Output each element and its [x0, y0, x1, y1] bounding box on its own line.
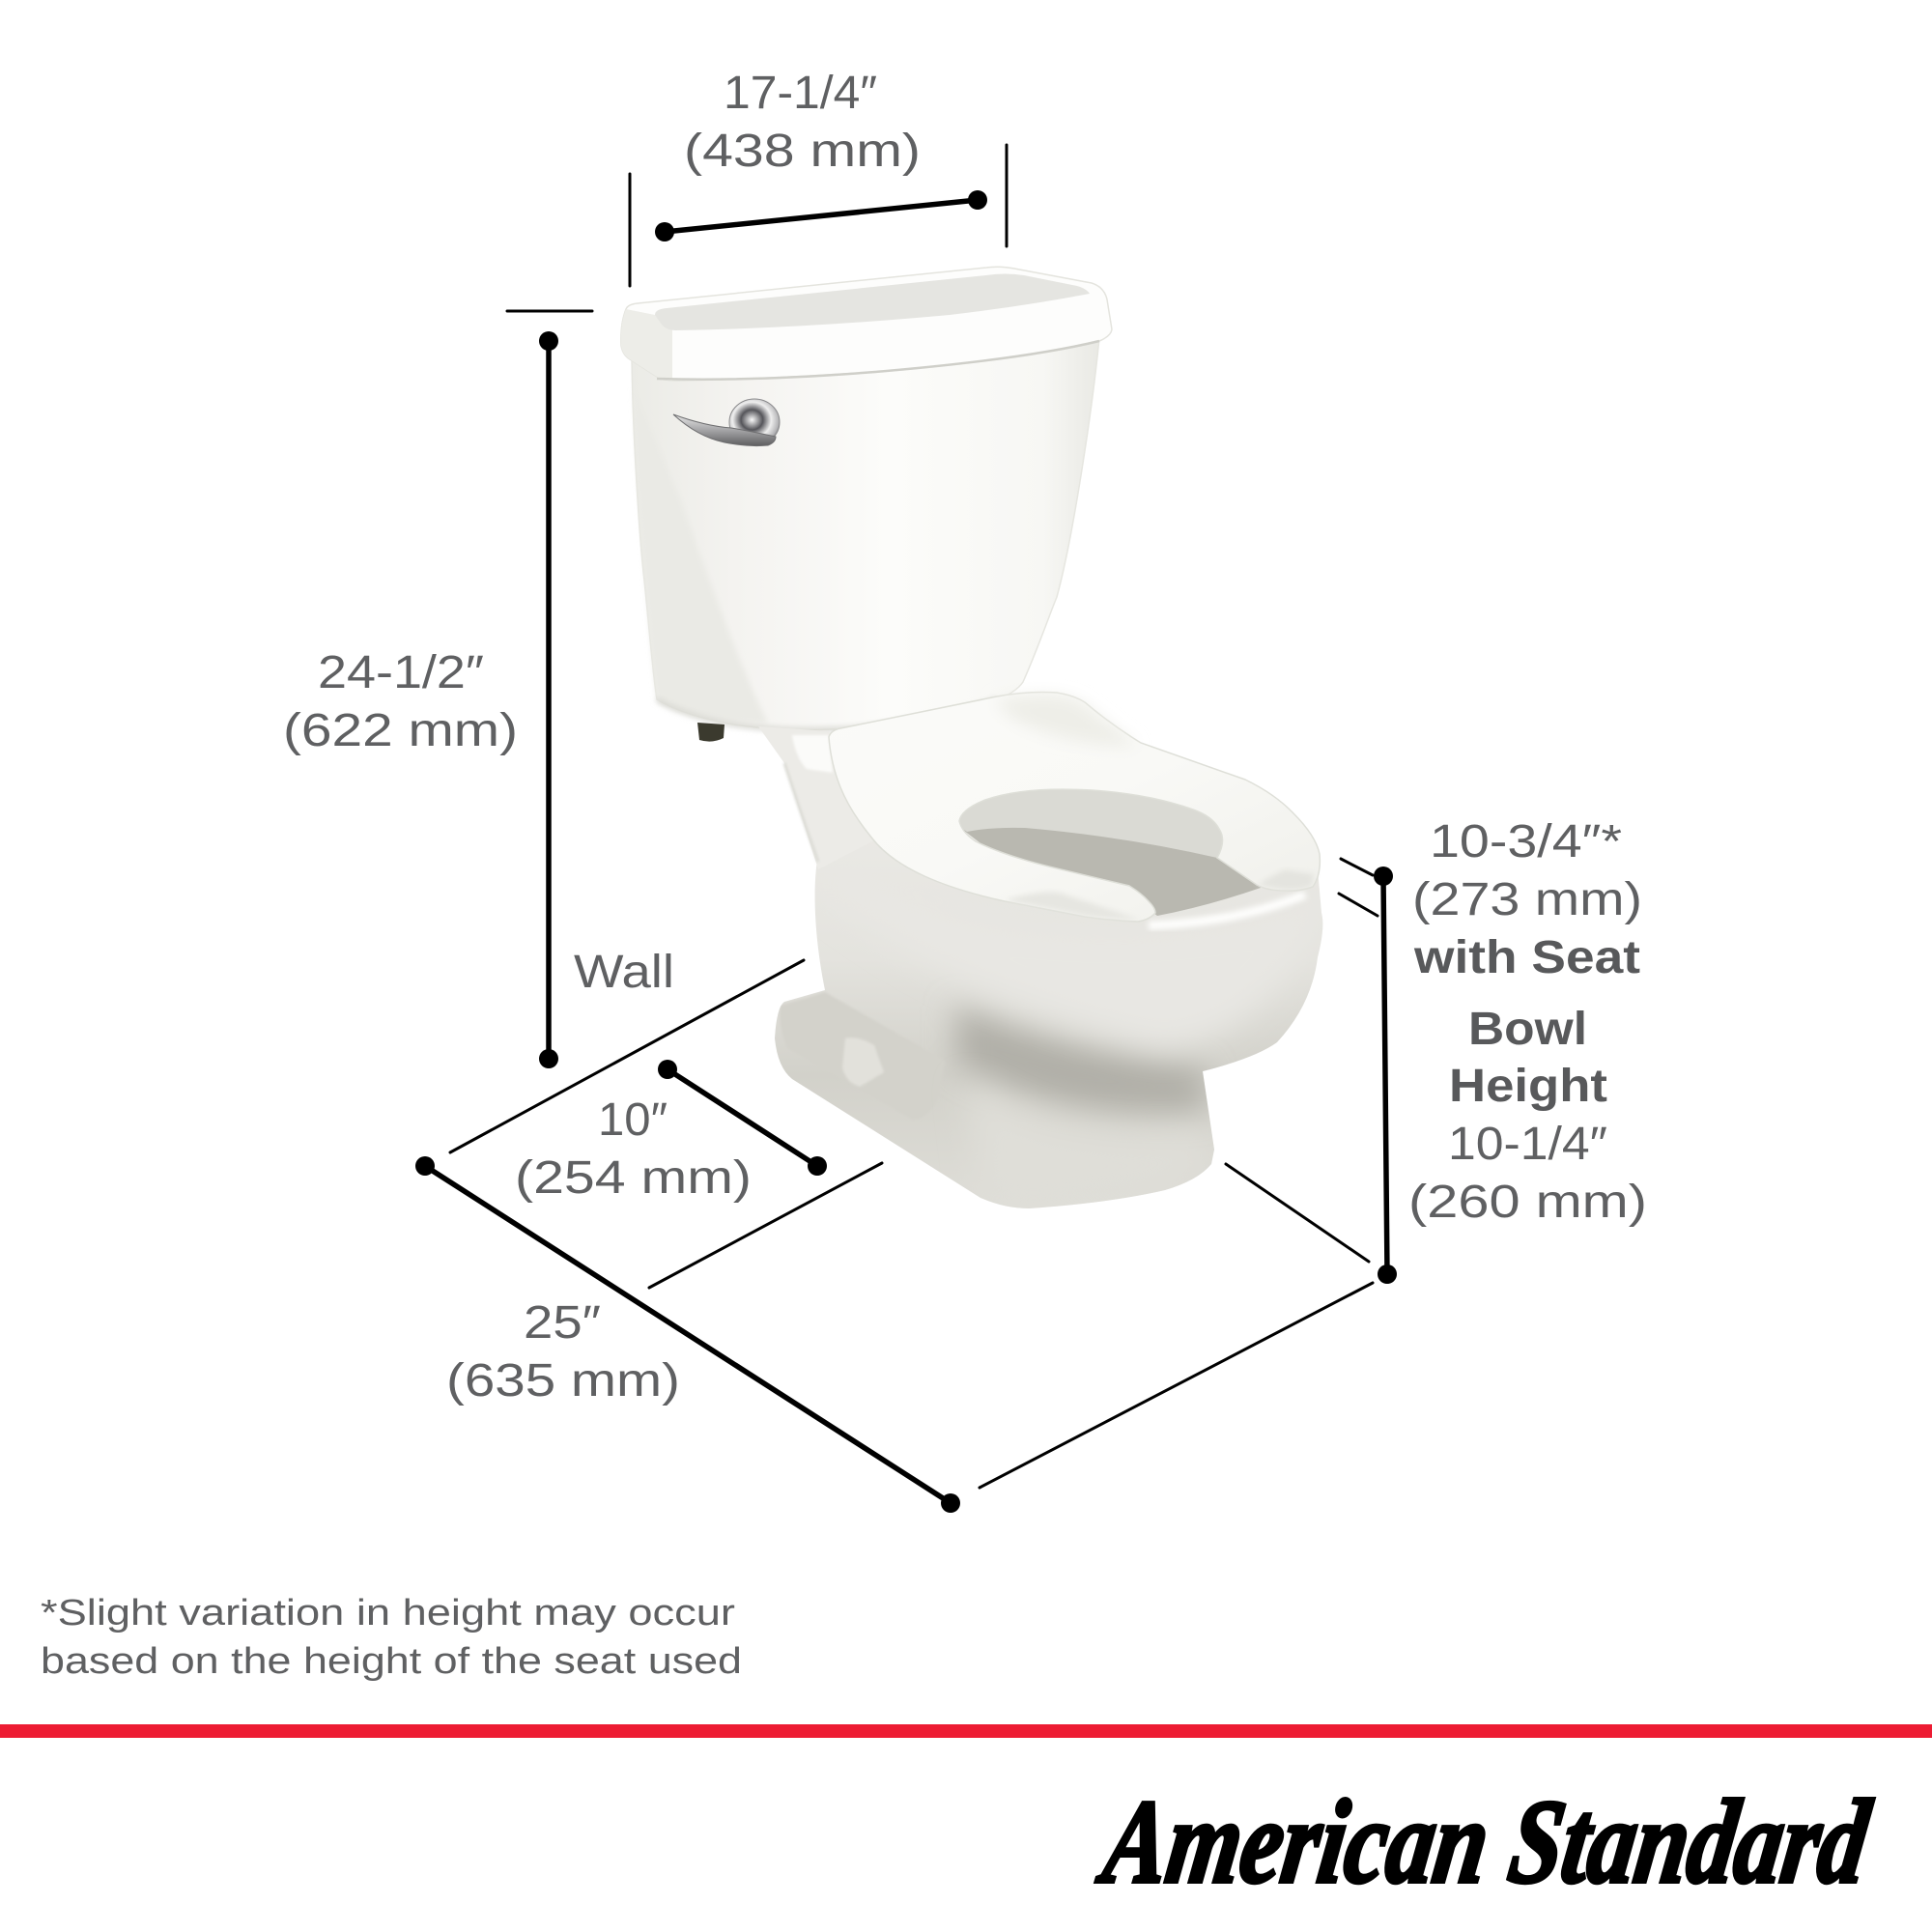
dimension: rough-in: (254 mm) — [515, 1152, 752, 1204]
dimension: overall height: (622 mm) — [283, 705, 518, 756]
dimension: overall depth — [415, 1156, 1373, 1513]
dimension: overall depth: 25″ — [524, 1297, 601, 1349]
dimension: bowl height — [1339, 816, 1647, 1284]
dimension: rough-in — [515, 1060, 882, 1288]
dimension: tank width: 17-1/4″ — [724, 68, 877, 119]
bowl neck — [758, 726, 874, 869]
dimension: overall depth: (635 mm) — [446, 1355, 680, 1406]
red divider bar — [0, 1724, 1932, 1738]
toilet seat — [829, 692, 1320, 922]
dimension: bowl height: with Seat — [1413, 932, 1640, 983]
toilet tank — [621, 267, 1112, 730]
dimension: rough-in: 10″ — [598, 1094, 668, 1146]
footnote — [41, 1593, 742, 1682]
toilet product photo — [621, 267, 1322, 1208]
dimension: overall height: 24-1/2″ — [318, 647, 484, 698]
wall label: Wall — [574, 947, 674, 998]
dimension: bowl height: Bowl — [1468, 1004, 1587, 1055]
dimension: bowl height: (273 mm) — [1412, 874, 1642, 925]
dimension: bowl height: (260 mm) — [1408, 1177, 1647, 1228]
icon: chrome flush lever — [673, 399, 780, 446]
footnote: *Slight variation in height may occur — [41, 1593, 735, 1634]
water inlet nipple — [697, 723, 724, 742]
dimension: bowl height: Height — [1449, 1061, 1607, 1112]
dimension: tank width: (438 mm) — [684, 126, 921, 177]
dimension: tank width — [630, 68, 1007, 286]
toilet bowl and pedestal — [775, 792, 1322, 1208]
bowl interior — [952, 778, 1261, 916]
footnote: based on the height of the seat used — [41, 1641, 742, 1682]
dimension: overall height — [283, 311, 592, 1068]
dimension: bowl height: 10-3/4″* — [1430, 816, 1622, 867]
wall reference line — [450, 960, 804, 1152]
dimension: bowl height: 10-1/4″ — [1448, 1119, 1607, 1170]
